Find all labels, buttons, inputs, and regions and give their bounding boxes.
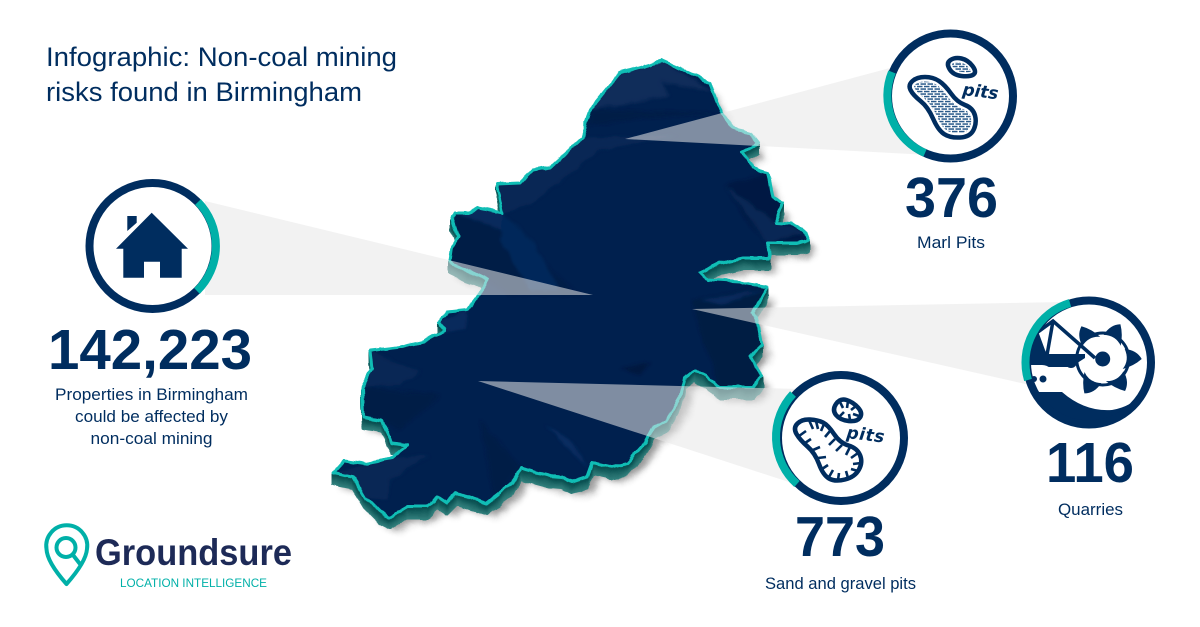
callout wedge: sand and gravel pits	[478, 381, 800, 484]
label: quarries: Quarries	[1058, 500, 1123, 519]
icon: location pin with magnifier	[46, 525, 87, 584]
panel: marl pits	[887, 34, 1013, 252]
excavator blades	[1073, 320, 1142, 398]
label: properties affected	[55, 385, 248, 448]
map extruded side	[333, 63, 808, 528]
logo tagline: LOCATION INTELLIGENCE	[120, 578, 267, 590]
figure: 142,223: 142,223	[48, 318, 252, 382]
map top surface	[333, 61, 808, 517]
map teal outline	[333, 61, 808, 517]
icon: marl pits in ring	[887, 34, 1013, 158]
panel: properties	[48, 183, 252, 448]
logo: Groundsure	[46, 525, 292, 590]
panel: quarries	[1018, 300, 1160, 519]
map facets	[333, 61, 808, 500]
icon: marl pits in ring: pits	[960, 80, 1000, 104]
sand pit ticks	[799, 401, 861, 480]
callout wedge: properties	[205, 201, 593, 295]
label: properties affected: could be affected by	[75, 407, 228, 426]
map drop shadow	[340, 75, 815, 531]
label: properties affected: Properties in Birmingham	[55, 385, 248, 404]
figure: 773: 773	[795, 505, 885, 569]
title: risks found in Birmingham	[46, 77, 362, 107]
callout wedge: marl pits	[625, 68, 930, 155]
title: Infographic: Non-coal mining	[46, 42, 397, 72]
label: marl pits: Marl Pits	[917, 233, 985, 252]
icon: sand pits in ring	[776, 375, 904, 501]
figure: 376: 376	[905, 166, 998, 230]
logo wordmark: Groundsure	[95, 532, 292, 573]
label: sand and gravel pits: Sand and gravel pits	[765, 574, 916, 593]
icon: house in ring	[90, 183, 216, 309]
panel: sand and gravel pits	[765, 375, 916, 593]
map of Birmingham	[333, 61, 815, 531]
title	[46, 42, 397, 107]
callout wedge: quarries	[692, 302, 1065, 385]
label: properties affected: non-coal mining	[90, 429, 212, 448]
figure: 116: 116	[1046, 431, 1134, 495]
icon: sand pits in ring: pits	[844, 423, 886, 448]
icon: bucket-wheel excavator in ring	[1022, 296, 1155, 428]
